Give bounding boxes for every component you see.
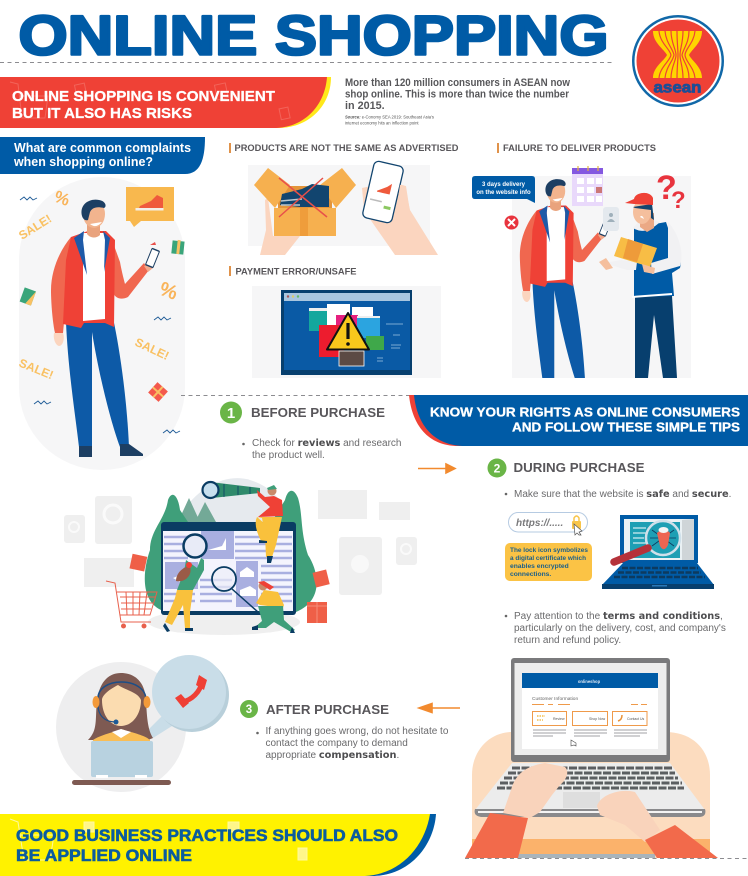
step 3: after purchase [240, 700, 449, 761]
logo: ASEAN [632, 15, 724, 107]
heading: payment error: PAYMENT ERROR/UNSAFE [236, 266, 356, 278]
panel: shopper illustration: SALE! [17, 356, 55, 382]
callout: lock icon [505, 543, 592, 581]
icon: id card [603, 207, 619, 231]
icon: shopping cart [106, 581, 157, 628]
illustration: payment warning [252, 286, 441, 378]
intro text [345, 77, 571, 126]
illustration: laptop and hands: Review [553, 717, 565, 721]
step 1: before purchase [220, 402, 401, 461]
arrow: to after purchase [419, 704, 460, 712]
logo: ASEAN: asean [654, 80, 702, 96]
icon: question marks: ? [671, 187, 686, 214]
illustration: laptop and hands: onlineshop [578, 679, 601, 684]
panel: shopper illustration: % [52, 187, 72, 210]
icon: question marks [656, 169, 686, 214]
icon: shopping bag [20, 287, 36, 306]
banner: good business practices [0, 814, 436, 876]
illustration: delivery dispute [472, 166, 691, 395]
heading: failure to deliver: FAILURE TO DELIVER PRODUCTS [503, 143, 656, 154]
banner: convenient but risky: ONLINE SHOPPING IS CONVENIENT [12, 89, 275, 105]
step 1: before purchase: 1 [227, 405, 235, 422]
kneeling figure [212, 567, 295, 633]
step 2: during purchase: DURING PURCHASE [514, 461, 644, 475]
banner: know your rights: KNOW YOUR RIGHTS AS ONLINE CONSUMERS [430, 406, 740, 420]
step 2: during purchase: return and refund policy. [514, 635, 621, 646]
panel: shopper illustration: % [156, 278, 181, 305]
illustration: customer support agent [56, 655, 229, 792]
step 2: during purchase: Pay attention to the terms and conditions, [514, 611, 723, 622]
figure: shopper [51, 200, 160, 457]
heading: common complaints: when shopping online? [13, 155, 153, 169]
callout: delivery promise [472, 176, 535, 203]
icon: gift [171, 240, 185, 255]
banner: good business practices: GOOD BUSINESS PRACTICES SHOULD ALSO [16, 827, 398, 845]
step 2: during purchase [488, 458, 731, 646]
illustration: researching products [64, 478, 417, 635]
title: ONLINE SHOPPING [18, 4, 608, 66]
callout: delivery promise: 3 days delivery [482, 182, 526, 188]
step 3: after purchase: If anything goes wrong, do not hesitate to [266, 726, 449, 737]
step 2: during purchase: 2 [494, 462, 501, 476]
callout: lock icon: enables encrypted [510, 563, 569, 570]
step 3: after purchase: appropriate compensation. [266, 750, 399, 761]
step 3: after purchase: AFTER PURCHASE [266, 703, 389, 717]
intro text: More than 120 million consumers in ASEAN now [345, 77, 571, 89]
heading: common complaints: What are common complaints [14, 141, 191, 155]
banner: know your rights: AND FOLLOW THESE SIMPLE TIPS [512, 420, 740, 434]
illustration: laptop and hands: Contact Us [627, 717, 645, 721]
intro text: Source: e-Conomy SEA 2019: Southeast Asia's [345, 114, 434, 120]
spyglass figure [202, 482, 283, 563]
illustration: laptop with bug [602, 515, 714, 589]
panel: shopper illustration [16, 177, 185, 470]
banner: convenient but risky: BUT IT ALSO HAS RISKS [12, 106, 192, 122]
intro text: internet economy hits an inflection point [345, 120, 419, 126]
callout: lock icon: The lock icon symbolizes [510, 547, 588, 554]
icon: calendar [572, 166, 603, 206]
banner: know your rights [409, 395, 748, 446]
icon: red gift [148, 382, 168, 402]
step 3: after purchase: contact the company to demand [266, 738, 408, 749]
callout: sneaker [126, 187, 174, 227]
icon: question marks: ? [656, 169, 677, 207]
icon: phone [175, 675, 207, 708]
step 2: during purchase: Make sure that the website is safe and secure. [514, 489, 731, 500]
illustration: wrong product [248, 160, 438, 255]
arrow: to during purchase [418, 464, 455, 473]
illustration: laptop and hands [465, 658, 718, 858]
panel: shopper illustration: SALE! [133, 335, 171, 363]
icon: red cross [504, 216, 518, 230]
callout: lock icon: a digital certificate which [510, 555, 586, 562]
step 1: before purchase: BEFORE PURCHASE [251, 406, 385, 420]
step 1: before purchase: Check for reviews and research [252, 438, 401, 449]
heading: common complaints [0, 137, 205, 174]
magnifier figure [163, 534, 206, 632]
step 2: during purchase: particularly on the delivery, cost, and company's [514, 623, 726, 634]
figure: customer [520, 179, 608, 378]
callout: delivery promise: on the website info [476, 190, 531, 196]
figure: courier [599, 193, 682, 378]
banner: good business practices: BE APPLIED ONLINE [16, 847, 192, 865]
intro text: shop online. This is more than twice the number [345, 88, 570, 100]
banner: convenient but risky [0, 77, 331, 128]
heading: products not as advertised: PRODUCTS ARE NOT THE SAME AS ADVERTISED [234, 143, 459, 154]
url bar: https://..... [516, 518, 563, 529]
callout: lock icon: connections. [510, 571, 551, 578]
step 1: before purchase: the product well. [252, 450, 325, 461]
illustration: laptop and hands: Shop Now [589, 717, 606, 721]
intro text: in 2015. [345, 100, 385, 112]
panel: shopper illustration: SALE! [16, 212, 54, 243]
step 3: after purchase: 3 [246, 704, 252, 716]
illustration: laptop and hands: Customer Information [532, 696, 578, 702]
url bar [508, 512, 588, 535]
icon: gifts [129, 554, 330, 623]
